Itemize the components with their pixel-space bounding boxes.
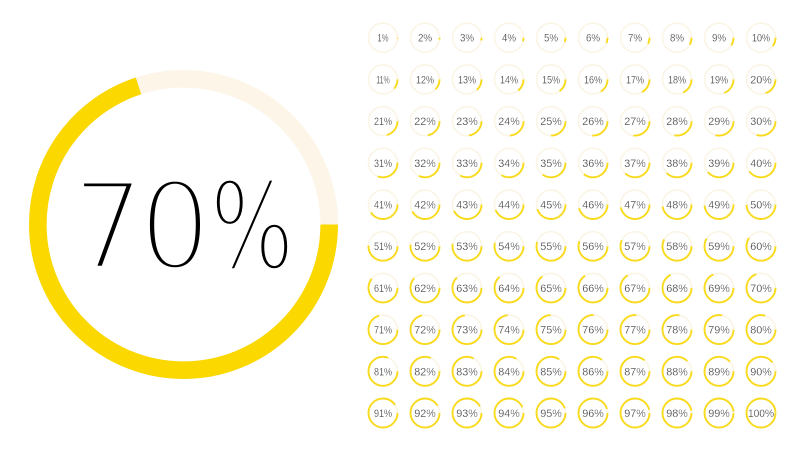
main gauge value: %	[210, 156, 294, 300]
grid of 100 small percentage gauges: 68%	[666, 283, 688, 295]
grid of 100 small percentage gauges: 67%	[624, 283, 646, 295]
grid of 100 small percentage gauges: 82%	[414, 366, 436, 378]
grid of 100 small percentage gauges: 3%	[460, 33, 474, 45]
main gauge value: 0	[139, 156, 211, 300]
grid of 100 small percentage gauges: 95%	[540, 408, 562, 420]
grid of 100 small percentage gauges: 59%	[708, 241, 730, 253]
grid of 100 small percentage gauges: 56%	[582, 241, 604, 253]
grid of 100 small percentage gauges: 83%	[456, 366, 478, 378]
grid of 100 small percentage gauges: 65%	[540, 283, 562, 295]
grid of 100 small percentage gauges: 9%	[712, 33, 726, 45]
grid of 100 small percentage gauges: 94%	[498, 408, 520, 420]
grid of 100 small percentage gauges: 49%	[708, 200, 730, 212]
grid of 100 small percentage gauges: 22%	[414, 116, 436, 128]
grid of 100 small percentage gauges: 63%	[456, 283, 478, 295]
grid of 100 small percentage gauges: 92%	[414, 408, 436, 420]
grid of 100 small percentage gauges: 44%	[498, 200, 520, 212]
grid of 100 small percentage gauges: 34%	[498, 158, 520, 170]
grid of 100 small percentage gauges: 17%	[626, 74, 644, 86]
grid of 100 small percentage gauges: 7%	[628, 33, 642, 45]
grid of 100 small percentage gauges: 76%	[582, 325, 604, 337]
grid of 100 small percentage gauges: 86%	[582, 366, 604, 378]
grid of 100 small percentage gauges: 12%	[416, 74, 434, 86]
grid of 100 small percentage gauges: 43%	[456, 200, 478, 212]
grid of 100 small percentage gauges: 61%	[374, 283, 392, 295]
grid of 100 small percentage gauges: 53%	[456, 241, 478, 253]
grid of 100 small percentage gauges: 37%	[624, 158, 646, 170]
grid of 100 small percentage gauges: 29%	[708, 116, 730, 128]
grid of 100 small percentage gauges: 45%	[540, 200, 562, 212]
grid of 100 small percentage gauges: 41%	[374, 200, 392, 212]
grid of 100 small percentage gauges: 62%	[414, 283, 436, 295]
grid of 100 small percentage gauges: 47%	[624, 200, 646, 212]
grid of 100 small percentage gauges: 42%	[414, 200, 436, 212]
grid of 100 small percentage gauges: 90%	[750, 366, 772, 378]
grid of 100 small percentage gauges: 48%	[666, 200, 688, 212]
grid of 100 small percentage gauges: 54%	[498, 241, 520, 253]
grid of 100 small percentage gauges: 70%	[750, 283, 772, 295]
grid of 100 small percentage gauges: 30%	[750, 116, 772, 128]
grid of 100 small percentage gauges: 96%	[582, 408, 604, 420]
grid of 100 small percentage gauges: 19%	[710, 74, 728, 86]
grid of 100 small percentage gauges: 46%	[582, 200, 604, 212]
grid of 100 small percentage gauges: 73%	[456, 325, 478, 337]
grid of 100 small percentage gauges: 93%	[456, 408, 478, 420]
grid of 100 small percentage gauges: 24%	[498, 116, 520, 128]
grid of 100 small percentage gauges: 81%	[374, 366, 392, 378]
grid of 100 small percentage gauges: 98%	[666, 408, 688, 420]
grid of 100 small percentage gauges: 50%	[750, 200, 772, 212]
main gauge: 70%	[38, 79, 329, 370]
grid of 100 small percentage gauges: 91%	[374, 408, 392, 420]
grid of 100 small percentage gauges: 26%	[582, 116, 604, 128]
grid of 100 small percentage gauges: 33%	[456, 158, 478, 170]
main gauge value	[71, 156, 294, 300]
grid of 100 small percentage gauges: 23%	[456, 116, 478, 128]
grid of 100 small percentage gauges: 57%	[624, 241, 646, 253]
grid of 100 small percentage gauges: 10%	[752, 33, 770, 45]
grid of 100 small percentage gauges: 79%	[708, 325, 730, 337]
grid of 100 small percentage gauges: 28%	[666, 116, 688, 128]
grid of 100 small percentage gauges: 25%	[540, 116, 562, 128]
grid of 100 small percentage gauges: 1%	[378, 33, 389, 45]
grid of 100 small percentage gauges: 52%	[414, 241, 436, 253]
grid of 100 small percentage gauges: 32%	[414, 158, 436, 170]
grid of 100 small percentage gauges: 51%	[374, 241, 392, 253]
grid of 100 small percentage gauges: 35%	[540, 158, 562, 170]
grid of 100 small percentage gauges: 39%	[708, 158, 730, 170]
grid of 100 small percentage gauges: 8%	[670, 33, 684, 45]
grid of 100 small percentage gauges: 5%	[544, 33, 558, 45]
grid of 100 small percentage gauges: 15%	[542, 74, 560, 86]
grid of 100 small percentage gauges: 11%	[376, 74, 390, 86]
grid of 100 small percentage gauges: 78%	[666, 325, 688, 337]
grid of 100 small percentage gauges: 97%	[624, 408, 646, 420]
grid of 100 small percentage gauges: 21%	[374, 116, 392, 128]
grid of 100 small percentage gauges: 66%	[582, 283, 604, 295]
grid of 100 small percentage gauges: 75%	[540, 325, 562, 337]
grid of 100 small percentage gauges: 89%	[708, 366, 730, 378]
grid of 100 small percentage gauges: 14%	[500, 74, 518, 86]
grid of 100 small percentage gauges: 77%	[624, 325, 646, 337]
grid of 100 small percentage gauges: 84%	[498, 366, 520, 378]
grid of 100 small percentage gauges: 55%	[540, 241, 562, 253]
grid of 100 small percentage gauges: 20%	[750, 74, 772, 86]
grid of 100 small percentage gauges: 72%	[414, 325, 436, 337]
grid of 100 small percentage gauges: 16%	[584, 74, 602, 86]
grid of 100 small percentage gauges: 100%	[748, 408, 774, 420]
grid of 100 small percentage gauges: 87%	[624, 366, 646, 378]
grid of 100 small percentage gauges: 69%	[708, 283, 730, 295]
grid of 100 small percentage gauges: 58%	[666, 241, 688, 253]
grid of 100 small percentage gauges: 31%	[374, 158, 392, 170]
grid of 100 small percentage gauges: 88%	[666, 366, 688, 378]
grid of 100 small percentage gauges: 60%	[750, 241, 772, 253]
grid of 100 small percentage gauges: 6%	[586, 33, 600, 45]
grid of 100 small percentage gauges: 36%	[582, 158, 604, 170]
main gauge value: 7	[71, 156, 145, 300]
grid of 100 small percentage gauges: 71%	[374, 325, 392, 337]
grid of 100 small percentage gauges: 99%	[708, 408, 730, 420]
grid of 100 small percentage gauges: 85%	[540, 366, 562, 378]
grid of 100 small percentage gauges	[368, 23, 776, 427]
grid of 100 small percentage gauges: 38%	[666, 158, 688, 170]
grid of 100 small percentage gauges: 74%	[498, 325, 520, 337]
grid of 100 small percentage gauges: 4%	[502, 33, 516, 45]
grid of 100 small percentage gauges: 2%	[418, 33, 432, 45]
grid of 100 small percentage gauges: 13%	[458, 74, 476, 86]
grid of 100 small percentage gauges: 18%	[668, 74, 686, 86]
grid of 100 small percentage gauges: 27%	[624, 116, 646, 128]
grid of 100 small percentage gauges: 80%	[750, 325, 772, 337]
grid of 100 small percentage gauges: 40%	[750, 158, 772, 170]
grid of 100 small percentage gauges: 64%	[498, 283, 520, 295]
